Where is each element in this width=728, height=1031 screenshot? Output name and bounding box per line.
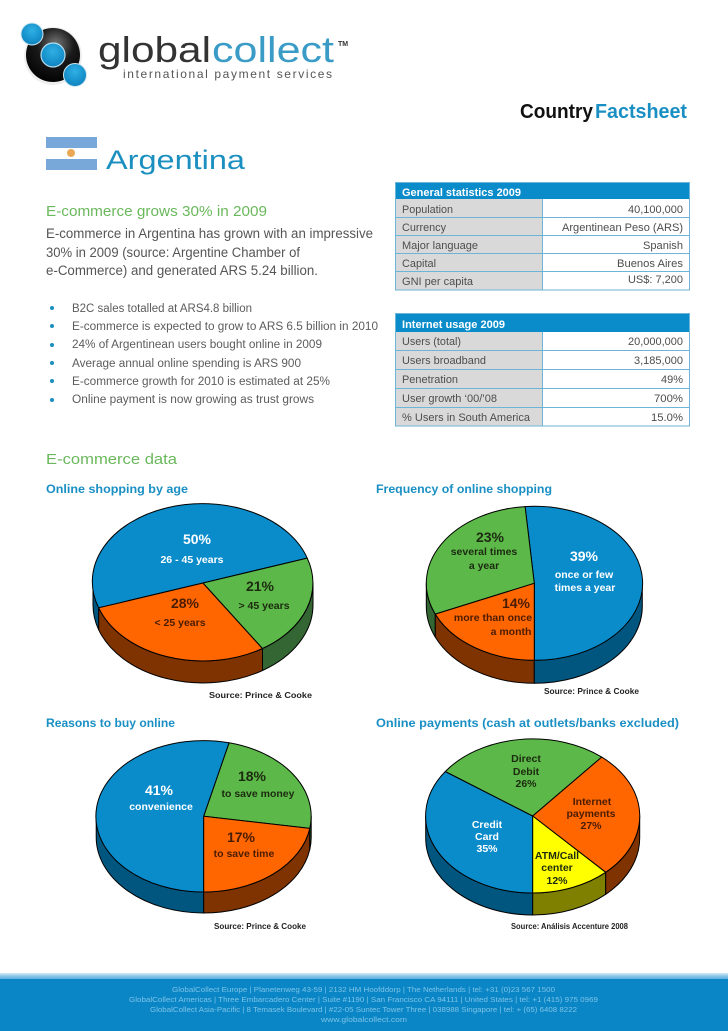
heading: reasons to buy online: Reasons to buy online [46, 716, 175, 730]
pie chart: online payments: Card [475, 831, 499, 843]
pie chart: online payments: center [541, 862, 573, 874]
table: general statistics: Argentinean Peso (ARS) [562, 222, 683, 234]
table: general statistics: Population [402, 204, 453, 216]
table: internet usage: Penetration [402, 374, 458, 386]
heading: online payments: Online payments (cash at outlets/banks excluded) [376, 716, 679, 730]
pie chart: reasons to buy online: convenience [129, 801, 193, 813]
footer band with office addresses: GlobalCollect Asia-Pacific | 8 Temasek Boulevard | #22-05 Suntec Tower Three | 038988 Singapore | tel: + (65) 6408 8222 [150, 1005, 577, 1014]
footer band with office addresses: GlobalCollect Americas | Three Embarcadero Center | Suite #1190 | San Francisco CA 94111 | United States | tel: +1 (415) 975 0969 [129, 995, 598, 1004]
table: internet usage: User growth ‘00/’08 [402, 393, 497, 405]
footer band with office addresses: GlobalCollect Europe | Planetenweg 43-59 | 2132 HM Hoofddorp | The Netherlands | tel: +31 (0)23 567 1500 [172, 985, 555, 994]
heading: Country Factsheet: Factsheet [595, 101, 687, 123]
logo: GlobalCollect: TM [338, 41, 348, 48]
pie chart: online payments: 12% [546, 875, 568, 887]
text block: introduction: E-commerce in Argentina has grown with an impressive [46, 226, 373, 241]
bullet list: E-commerce is expected to grow to ARS 6.5 billion in 2010 [72, 321, 378, 333]
table: general statistics: Buenos Aires [617, 258, 683, 270]
pie chart: online payments: 35% [476, 843, 498, 855]
pie chart: online shopping by age: 21% [246, 578, 275, 594]
pie chart: online payments: Credit [472, 819, 503, 831]
heading: frequency of online shopping: Frequency of online shopping [376, 482, 552, 496]
pie chart: online shopping by age: 50% [183, 531, 212, 547]
pie chart: frequency of online shopping: once or few [555, 569, 614, 581]
table: internet usage: 15.0% [651, 412, 683, 424]
table: internet usage: 700% [654, 393, 683, 405]
pie chart: online shopping by age: 26 - 45 years [160, 554, 224, 566]
pie chart: online payments: Direct [511, 753, 541, 765]
pie chart: reasons to buy online: to save time [214, 848, 275, 860]
pie chart: online payments: 27% [580, 820, 602, 832]
bullet list: 24% of Argentinean users bought online in 2009 [72, 339, 322, 351]
table: general statistics [395, 182, 690, 290]
pie chart: frequency of online shopping: 39% [570, 548, 599, 564]
bullet list: E-commerce growth for 2010 is estimated at 25% [72, 376, 330, 388]
pie chart: reasons to buy online [96, 741, 311, 913]
pie chart: online payments: Internet [573, 796, 612, 808]
table: internet usage: Internet usage 2009 [402, 319, 505, 331]
pie chart: frequency of online shopping: a year [469, 560, 499, 572]
heading: online shopping by age: Online shopping by age [46, 482, 188, 496]
text block: introduction: e-Commerce) and generated ARS 5.24 billion. [46, 263, 318, 278]
table: internet usage: 20,000,000 [628, 336, 683, 348]
footer band with office addresses [0, 973, 728, 1031]
pie chart: online shopping by age [92, 504, 313, 683]
pie chart: frequency of online shopping [426, 506, 643, 683]
logo: GlobalCollect [21, 23, 348, 86]
title: Argentina: Argentina [106, 145, 246, 175]
pie chart: online payments: 26% [515, 778, 537, 790]
pie chart: reasons to buy online: 17% [227, 829, 256, 845]
table: internet usage: 3,185,000 [634, 355, 683, 367]
bullet list: Average annual online spending is ARS 900 [72, 358, 301, 370]
table: internet usage: % Users in South America [402, 412, 531, 424]
pie chart: online shopping by age: 28% [171, 595, 200, 611]
table: internet usage: Users (total) [402, 336, 461, 348]
pie chart: frequency of online shopping: times a year [555, 582, 615, 594]
source: payments chart: Source: Análisis Accenture 2008 [511, 921, 628, 931]
pie chart: online payments: ATM/Call [535, 850, 579, 862]
table: general statistics: Spanish [643, 240, 683, 252]
heading: E-commerce data: E-commerce data [46, 451, 178, 468]
pie chart: frequency of online shopping: several times [451, 546, 517, 558]
table: internet usage [395, 313, 690, 426]
pie chart: frequency of online shopping: a month [491, 626, 531, 638]
pie chart: online payments: Debit [513, 766, 540, 778]
pie chart: online payments: payments [566, 808, 616, 820]
footer band with office addresses: www.globalcollect.com [320, 1015, 407, 1024]
table: general statistics: General statistics 2009 [402, 187, 521, 199]
table: general statistics: 40,100,000 [628, 204, 683, 216]
heading: Country Factsheet [520, 101, 687, 123]
source: age chart: Source: Prince & Cooke [209, 690, 312, 700]
pie chart: frequency of online shopping: 23% [476, 529, 505, 545]
pie chart: frequency of online shopping: 14% [502, 595, 531, 611]
logo: GlobalCollect: global [98, 29, 211, 70]
table: general statistics: Major language [402, 240, 478, 252]
text block: introduction: 30% in 2009 (source: Argentine Chamber of [46, 245, 300, 260]
heading: E-commerce grows: E-commerce grows 30% in 2009 [46, 203, 267, 220]
icon: flag of Argentina [46, 137, 97, 170]
table: internet usage: Users broadband [402, 355, 486, 367]
table: internet usage: 49% [661, 374, 683, 386]
text block: introduction [46, 226, 373, 278]
heading: Country Factsheet: Country [520, 101, 594, 123]
pie chart: reasons to buy online: 18% [238, 768, 267, 784]
bullet list: Online payment is now growing as trust grows [72, 394, 314, 406]
bullet list [50, 303, 378, 406]
table: general statistics: GNI per capita [402, 276, 474, 288]
bullet list: B2C sales totalled at ARS4.8 billion [72, 303, 252, 315]
pie chart: reasons to buy online: 41% [145, 782, 174, 798]
pie chart: online shopping by age: < 25 years [154, 617, 206, 629]
pie chart: online shopping by age: > 45 years [238, 600, 290, 612]
source: frequency chart: Source: Prince & Cooke [544, 686, 639, 696]
pie chart: frequency of online shopping: more than once [454, 612, 532, 624]
pie chart: reasons to buy online: to save money [222, 788, 295, 800]
table: general statistics: Capital [402, 258, 436, 270]
table: general statistics: Currency [402, 222, 446, 234]
table: general statistics: US$: 7,200 [628, 274, 683, 286]
logo: GlobalCollect: international payment services [123, 67, 332, 81]
logo: GlobalCollect: collect [212, 29, 334, 70]
source: reasons chart: Source: Prince & Cooke [214, 921, 306, 931]
pie chart: online payments [426, 739, 640, 915]
